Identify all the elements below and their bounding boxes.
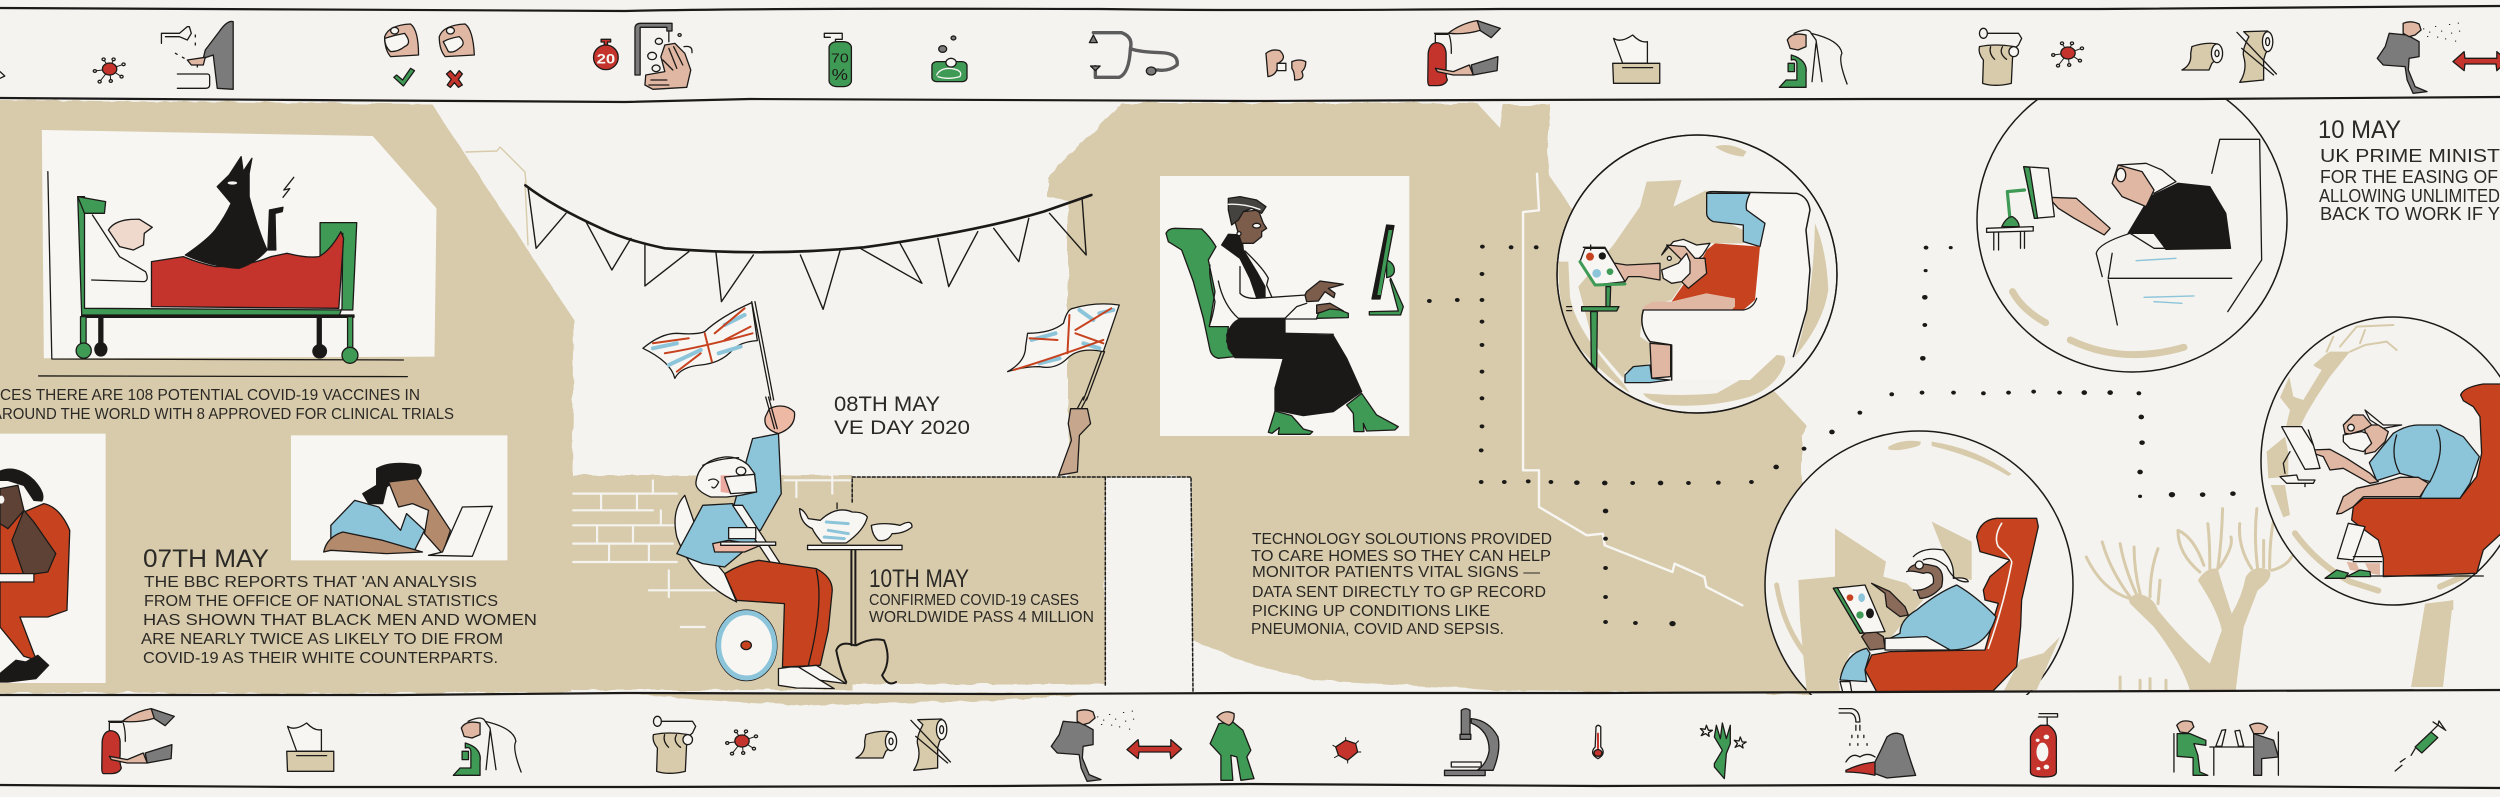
icon: red pump bottle: [2030, 714, 2058, 777]
bunting: [525, 185, 1091, 309]
text: vaccines: [0, 387, 454, 423]
icon: virus: [93, 58, 125, 83]
tan smear below strip line: [625, 693, 1090, 705]
panel: 10th May card: [852, 477, 1193, 694]
icon: distance arrow: [1127, 740, 1182, 759]
panel: woman at computer: [1160, 176, 1409, 436]
icon: incorrect mask: [439, 24, 474, 87]
icon: sneezing person: [2377, 22, 2460, 93]
icon: washing hands at sink: [161, 21, 233, 89]
text: 08th May VE Day: VE DAY 2020: [834, 418, 970, 439]
text: 10 May: [2318, 116, 2500, 224]
tan wall shapes: [0, 100, 1810, 694]
text: 08th May VE Day: 08TH MAY: [834, 393, 940, 416]
text: 07th May: FROM THE OFFICE OF NATIONAL STATISTICS: [144, 593, 498, 610]
bubble: woman in red armchair with tablet: [1765, 431, 2073, 739]
icon: tissue box: [287, 723, 334, 771]
bottom strip paper: [0, 695, 2500, 797]
icon: thermometer: [1593, 725, 1603, 759]
icon: toilet roll: [856, 731, 897, 758]
icon: stethoscope: [1089, 33, 1177, 77]
icon: 70 percent gel bottle: [824, 33, 851, 87]
icon: distance arrow: [2453, 52, 2500, 71]
text: technology solutions: DATA SENT DIRECTLY TO GP RECORD: [1252, 584, 1546, 601]
text: 07th May: ARE NEARLY TWICE AS LIKELY TO DIE FROM: [141, 631, 503, 648]
text: vaccines: AROUND THE WORLD WITH 8 APPROVED FOR CLINICAL TRIALS: [0, 406, 454, 423]
icon: crossed out toilet roll: [911, 719, 950, 770]
bare tree: [2086, 509, 2453, 690]
icon: scientist at microscope: [1779, 30, 1847, 87]
thin roof outline: [466, 147, 528, 245]
icon: green person: [1210, 712, 1254, 780]
icon: syringe: [2395, 721, 2446, 771]
black cat: [185, 157, 283, 268]
text: 07th May: 07TH MAY: [143, 545, 269, 573]
text: 10 May: UK PRIME MINIST: [2320, 146, 2500, 166]
panel: woman in blue at laptop: [291, 435, 507, 560]
text: 07th May: HAS SHOWN THAT BLACK MEN AND WOMEN: [143, 612, 537, 629]
top strip paper: [0, 0, 2500, 100]
icon: crossed out toilet roll: [2237, 31, 2276, 82]
icon: virus: [2052, 42, 2084, 67]
text: technology solutions: [1251, 531, 1552, 638]
icon: toilet roll: [2182, 43, 2223, 70]
bubble: man in red armchair with laptop: [2261, 317, 2500, 610]
icon: virus: [726, 730, 758, 755]
text: technology solutions: TECHNOLOGY SOLOUTIONS PROVIDED: [1252, 531, 1552, 548]
text: technology solutions: PICKING UP CONDITIONS LIKE: [1252, 603, 1490, 620]
bubble: man in orange at monitor: [1557, 135, 1837, 413]
man in wheelchair: [675, 397, 912, 689]
icon: tap and lathered hands: [635, 23, 692, 89]
text: vaccines: CES THERE ARE 108 POTENTIAL COVID-19 VACCINES IN: [0, 387, 420, 404]
text: technology solutions: PNEUMONIA, COVID AND SEPSIS.: [1251, 621, 1504, 638]
bed frame: [76, 197, 358, 363]
white crack line: [1523, 174, 1742, 605]
icon: 70 percent gel bottle: 70: [831, 51, 849, 66]
text: technology solutions: MONITOR PATIENTS VITAL SIGNS —: [1252, 564, 1541, 581]
text: 07th May: [141, 545, 537, 667]
text: 10 May: BACK TO WORK IF Y: [2320, 204, 2500, 224]
text: 10th May: WORLDWIDE PASS 4 MILLION: [869, 609, 1094, 626]
text: 10th May: 10TH MAY: [869, 565, 969, 593]
connecting dots: [1427, 245, 2236, 626]
brick wall mortar: [573, 477, 852, 627]
text: 08th May VE Day: [834, 393, 970, 439]
text: 10th May: CONFIRMED COVID-19 CASES: [869, 592, 1079, 609]
flag left: [643, 302, 774, 400]
icon: tissue box: [1613, 35, 1660, 83]
icon: microscope: [1445, 709, 1499, 776]
text: 10 May: FOR THE EASING OF: [2320, 167, 2498, 187]
icon: toilet roll on holder: [653, 716, 696, 773]
icon: green hand with sparkles: [1700, 723, 1746, 779]
text: 10 May: 10 MAY: [2318, 116, 2401, 144]
patient head: [108, 219, 152, 250]
icon: 20 second timer: 20: [597, 52, 615, 67]
icon: two people at desks: [2174, 721, 2278, 775]
icon: sanitizer and hands: [1428, 21, 1500, 86]
top icon strip: [0, 21, 2500, 93]
panel: woman in orange: [0, 434, 106, 683]
text: technology solutions: TO CARE HOMES SO THEY CAN HELP: [1251, 548, 1551, 565]
raised arm and hand: [1059, 397, 1091, 475]
bubble: woman in black at screen: [1977, 68, 2287, 372]
icon: correct mask: [385, 24, 419, 86]
text: 07th May: THE BBC REPORTS THAT 'AN ANALYSIS: [144, 574, 477, 591]
icon: scientist at microscope: [453, 718, 521, 775]
red blanket: [151, 232, 344, 308]
icon: blowing nose: [1266, 50, 1306, 80]
panel: hospital bed window: [39, 130, 436, 377]
bottom icon strip: [102, 709, 2446, 781]
icon: sanitizer and hands: [102, 709, 174, 774]
icon: 70 percent gel bottle: %: [832, 66, 848, 84]
icon: shower and figure: [1839, 709, 1916, 778]
icon: toilet roll on holder: [1979, 28, 2022, 85]
icon: sneezing person: [1051, 710, 1134, 781]
text: 10th May: [869, 565, 1094, 626]
icon: red virus: [1333, 738, 1361, 763]
flag right with raised arm: [1008, 304, 1119, 400]
text: 07th May: COVID-19 AS THEIR WHITE COUNTERPARTS.: [143, 650, 498, 667]
icon: 20 second timer: [594, 39, 618, 70]
icon: partial arrow: [0, 72, 5, 78]
icon: soap bar: [932, 36, 967, 82]
